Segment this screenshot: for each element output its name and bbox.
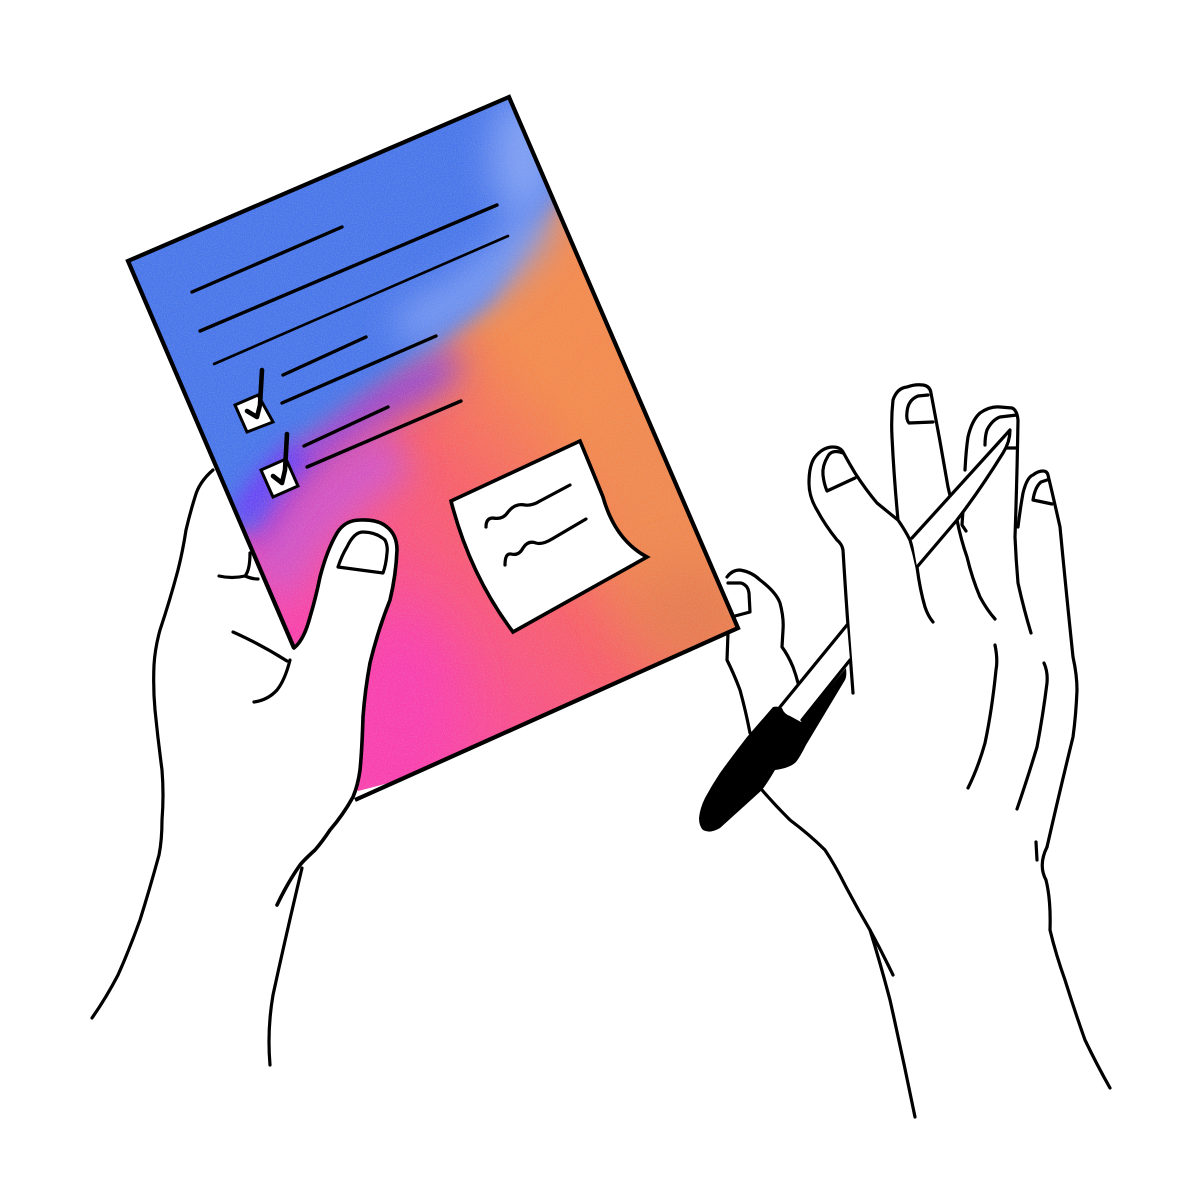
pinky nail (1033, 480, 1052, 504)
outer hand edge (92, 470, 213, 1018)
checklist row 2 (261, 401, 461, 497)
pen upper shaft (912, 430, 1010, 567)
sticky note (451, 441, 647, 632)
thumb nail (338, 532, 387, 573)
wrist left edge (762, 790, 915, 1117)
right hand thumb behind the paper (727, 570, 798, 733)
middle nail (907, 395, 933, 423)
thumb outline (277, 520, 397, 905)
pinky finger (1018, 471, 1077, 847)
ring finger lower piece (962, 510, 966, 531)
pen lower shaft (780, 625, 850, 720)
paper outline (128, 97, 738, 800)
illustration: hands holding a checklist and a pen (90, 94, 1112, 1119)
thumb fill (294, 520, 397, 800)
gradient fill (130, 100, 736, 791)
index finger and hand edge (809, 447, 933, 693)
palm creases (968, 645, 997, 788)
pen black grip (699, 668, 846, 832)
right hand (762, 385, 1110, 1117)
thumb nail (728, 583, 750, 616)
pen (699, 430, 1010, 832)
ring finger (965, 407, 1031, 633)
left hand holding the paper (92, 470, 397, 1065)
paper sheet with gradient (125, 94, 741, 802)
finger creases (219, 553, 258, 579)
middle finger (892, 385, 995, 619)
wrist right edge (1036, 842, 1110, 1088)
index nail (823, 452, 855, 491)
checklist row 1 (235, 336, 436, 432)
text lines (192, 205, 508, 364)
wrist edge (269, 868, 302, 1065)
ring nail (985, 415, 1017, 448)
